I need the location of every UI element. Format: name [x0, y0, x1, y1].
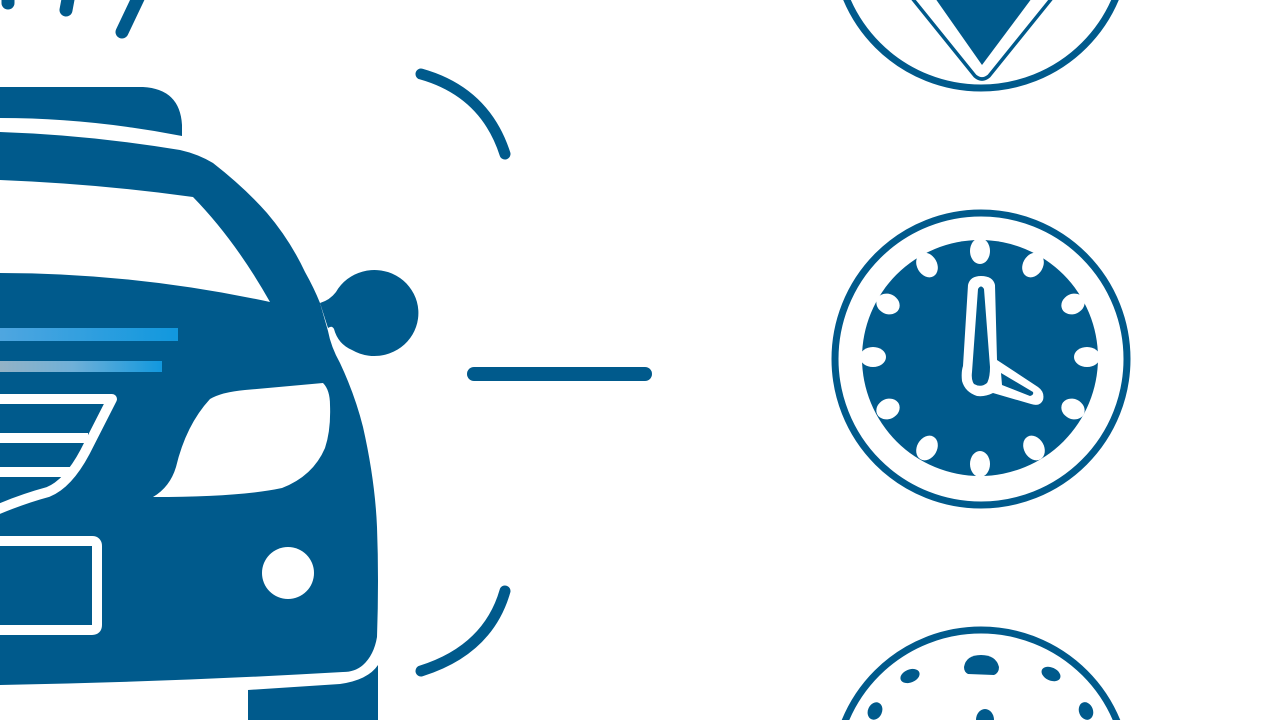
- icon: shield in circle: [835, 0, 1127, 88]
- icon: lower dial: [834, 630, 1128, 720]
- arc: lower signal: [421, 591, 505, 671]
- car hood highlight stripes: [0, 328, 178, 372]
- car fog lamp: [262, 547, 314, 599]
- car grille: [0, 399, 112, 511]
- motion ticks above car: [8, 0, 141, 32]
- icon: clock: [835, 213, 1127, 505]
- icon: car: [0, 87, 418, 720]
- connector line: [474, 367, 645, 381]
- clock outer ring: [835, 213, 1127, 505]
- clock hour marks: [860, 238, 1100, 477]
- car licence plate: [0, 541, 97, 630]
- arc: upper signal: [421, 74, 505, 154]
- car headlight: [153, 383, 330, 497]
- car windshield: [0, 180, 270, 302]
- clock face: [862, 240, 1098, 476]
- clock hands: [962, 276, 1043, 405]
- car roof light bar: [0, 87, 182, 136]
- car wheel: [248, 665, 378, 720]
- car side mirror: [320, 270, 418, 356]
- car body: [0, 132, 378, 685]
